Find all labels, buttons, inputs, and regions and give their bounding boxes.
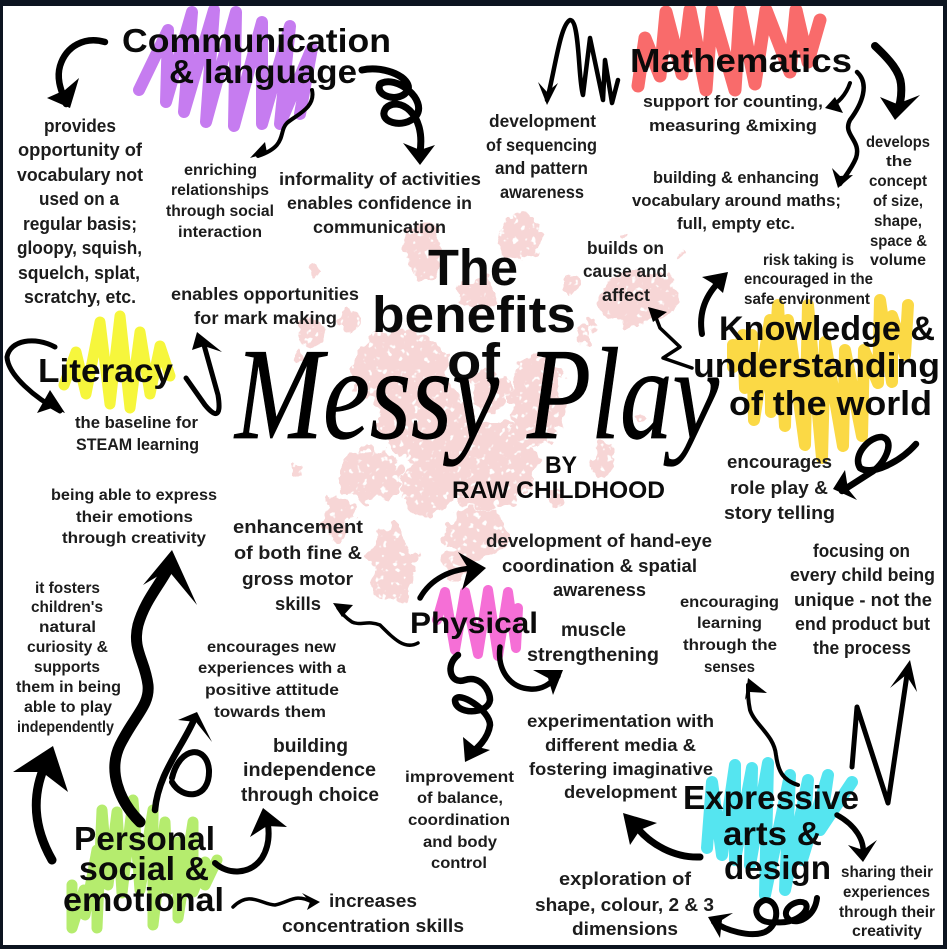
text: hand-eye coordination: development of hand-eye [486,531,712,551]
loop arrow to role play text [833,437,916,500]
heading: knowledge and understanding: Knowledge & [719,310,935,348]
text: concentration: increases [329,891,417,911]
text: vocabulary opportunity: provides [44,115,116,136]
arrow to vocabulary text [47,40,105,108]
text: learning through senses: encouraging [680,594,779,611]
text: curiosity and independent play: natural [39,619,96,636]
text: sharing experiences: experiences [843,884,930,901]
text: sequencing and pattern [486,111,597,202]
text: maths vocabulary: building & enhancing [653,168,819,187]
text: hand-eye coordination: awareness [553,580,646,600]
text: risk taking: risk taking is [763,252,854,269]
arrow to curiosity text [13,746,68,860]
byline: RAW CHILDHOOD [452,477,665,504]
text: cause and affect [583,238,667,305]
text: informality of activities: informality of activities [279,169,481,189]
text: role play: story telling [724,503,835,523]
text: balance and coordination: and body [423,834,497,851]
text: risk taking: encouraged in the [744,271,873,288]
text: unique child process [790,541,935,658]
text: steam learning: STEAM learning [76,436,199,454]
heading: knowledge and understanding: understanding [693,347,940,385]
text: size shape space volume: concept [869,173,928,190]
heading: personal social emotional: social & [79,850,209,887]
text: sharing experiences: creativity [852,923,922,940]
title: messy play: Messy [233,322,500,467]
text: size shape space volume: space & [870,233,927,250]
green scribble [72,800,217,928]
arrow to risk taking text [701,272,728,334]
loop arrow to confidence text [362,69,435,165]
title: messy play: Play [526,322,720,467]
heading: knowledge and understanding [693,310,940,423]
byline: BY [545,452,577,479]
text: unique child process: focusing on [813,541,910,561]
arrow to counting text [825,83,850,113]
text: steam learning [75,414,199,454]
title: the benefits of: of [447,333,501,390]
text: unique child process: every child being [790,565,935,585]
text: express emotions: being able to express [51,487,217,504]
text: fine and gross motor skills: enhancement [233,516,363,537]
text: vocabulary opportunity: opportunity of [18,139,143,160]
zigzag arrow to sequencing text [538,20,618,105]
heading: expressive arts and design [683,779,859,886]
panel: personal social and emotional [13,487,464,936]
text: independence through choice: building [273,736,348,757]
text: curiosity and independent play: supports [34,659,100,676]
text: experimentation and imagination: experimentation with [527,711,714,731]
text: size shape space volume: the [886,153,912,170]
text: counting and measuring [643,92,823,135]
text: learning through senses: through the [683,637,777,654]
text: size shape space volume [866,134,930,269]
wave arrow to concentration text [233,893,320,910]
text: balance and coordination: of balance, [417,790,503,807]
text: muscle strengthening [527,619,659,666]
text: mark making: enables opportunities [171,284,359,304]
heading: personal social emotional: emotional [63,881,224,918]
text: counting and measuring: support for counting, [643,92,823,111]
text: balance and coordination: control [431,855,487,872]
text: vocabulary opportunity: scratchy, etc. [24,286,136,307]
title: the benefits of: benefits [372,286,576,343]
arrow to senses text [745,678,798,785]
text: sequencing and pattern: of sequencing [486,135,597,155]
panel: knowledge and understanding of the world [583,238,940,523]
text: fine and gross motor skills [233,516,363,614]
text: concentration [282,891,464,936]
arrow to motor skills text [333,603,418,645]
loop arrow to balance text [451,655,490,762]
text: enriching relationships: enriching [184,162,257,179]
yellow scribble [733,300,908,458]
yellow scribble [64,316,170,408]
text: express emotions: through creativity [62,530,206,547]
text: vocabulary opportunity: regular basis; [23,213,137,234]
text: fine and gross motor skills: of both fine & [234,542,362,563]
text: balance and coordination [405,769,514,872]
text: muscle strengthening: strengthening [527,644,659,666]
text: learning through senses: learning [697,615,762,632]
text: sharing experiences: through their [839,904,935,921]
text: new experiences: positive attitude [205,682,339,699]
arrow to independence text [215,808,287,871]
heading: physical: Physical [410,607,538,640]
heading: communication and language: Communication [122,22,391,59]
text: muscle strengthening: muscle [561,619,626,641]
text: unique child process: the process [813,638,911,658]
red scribble [638,10,820,90]
wavy arrow to maths vocabulary text [832,72,864,188]
text: experimentation and imagination: different media & [545,735,696,755]
arrow to hand-eye text [420,552,486,598]
arrow to size and shape text [875,46,920,120]
text: enriching relationships: relationships [171,182,269,199]
heading: literacy: Literacy [38,352,174,389]
panel: literacy [7,284,359,454]
text: sequencing and pattern: awareness [500,182,584,202]
text: informality of activities: communication [313,217,446,237]
text: informality of activities [279,169,481,237]
text: vocabulary opportunity: gloopy, squish, [17,237,142,258]
arrow to muscle text [500,647,563,695]
heading: expressive arts and design: design [724,849,831,886]
heading: knowledge and understanding: of the world [729,385,932,423]
text: curiosity and independent play: independently [17,719,114,736]
title: messy play [233,322,720,467]
text: vocabulary opportunity: used on a [39,188,120,209]
text: counting and measuring: measuring &mixing [649,116,817,135]
text: vocabulary opportunity: vocabulary not [17,164,143,185]
text: vocabulary opportunity [17,115,143,307]
text: curiosity and independent play: it fosters [35,580,100,597]
n-shaped arrow to process text [852,660,917,803]
panel: mathematics [486,10,930,269]
arrow to sharing text [837,815,877,862]
squiggle arrow to cause and affect text [648,307,692,368]
text: maths vocabulary: vocabulary around maths; [632,191,841,210]
cyan scribble [707,763,852,895]
text: learning through senses: senses [704,659,755,676]
text: cause and affect: cause and [583,261,667,281]
text: new experiences [198,639,346,721]
text: shape colour dimensions: dimensions [572,919,678,939]
pink scribble [437,590,518,656]
panel: expressive arts and design [527,541,935,940]
text: maths vocabulary: full, empty etc. [677,214,795,233]
purple scribble [139,10,312,126]
text: experimentation and imagination: fostering imaginative [529,759,713,779]
arrow to media text [623,813,700,857]
heading: personal social emotional: Personal [74,820,215,857]
text: enriching relationships [166,162,274,241]
text: concentration: concentration skills [282,916,464,936]
text: shape colour dimensions: shape, colour, 2 & 3 [535,895,714,915]
text: curiosity and independent play: curiosity & [27,639,108,656]
heading: expressive arts and design: arts & [723,815,822,852]
text: sharing experiences [839,864,935,940]
text: role play: encourages [727,452,832,472]
text: experimentation and imagination: development [564,782,677,802]
text: size shape space volume: shape, [874,213,922,230]
text: informality of activities: enables confidence in [287,193,472,213]
text: shape colour dimensions: exploration of [559,869,692,889]
big arrow to emotions text [115,550,197,822]
paint splatter [294,214,689,603]
heading: communication and language: & language [169,53,357,90]
text: risk taking [744,252,873,308]
text: independence through choice [241,736,379,806]
text: new experiences: encourages new [207,639,337,656]
text: risk taking: safe environment [744,291,870,308]
heading: mathematics: Mathematics [630,42,852,79]
text: express emotions [51,487,217,547]
text: mark making [171,284,359,328]
text: size shape space volume: volume [870,252,926,269]
text: steam learning: the baseline for [75,414,199,432]
text: balance and coordination: coordination [408,812,510,829]
heading: expressive arts and design: Expressive [683,779,859,816]
text: independence through choice: through choice [241,785,379,806]
text: learning through senses [680,594,779,676]
title [233,239,720,504]
loop arrow to shape and colour text [708,898,817,938]
panel: physical [233,516,712,872]
text: cause and affect: builds on [587,238,664,258]
text: fine and gross motor skills: skills [275,593,321,614]
text: experimentation and imagination [527,711,714,802]
text: role play [724,452,835,523]
text: unique child process: end product but [795,614,930,634]
text: new experiences: experiences with a [198,660,346,677]
heading: communication and language [122,22,391,90]
text: mark making: for mark making [194,308,337,328]
text: curiosity and independent play: able to play [24,699,112,716]
text: balance and coordination: improvement [405,769,514,786]
text: curiosity and independent play [16,580,121,736]
text: express emotions: their emotions [76,509,193,526]
text: curiosity and independent play: children's [31,599,103,616]
text: cause and affect: affect [602,285,650,305]
text: role play: role play & [730,478,828,498]
byline [452,452,665,504]
arrow to steam text [7,341,65,413]
text: size shape space volume: develops [866,134,930,151]
text: new experiences: towards them [214,704,326,721]
panel: communication and language [17,10,481,307]
double arrow to mark making text [186,332,222,414]
heading: personal social emotional [63,820,224,918]
text: fine and gross motor skills: gross motor [242,568,353,589]
text: vocabulary opportunity: squelch, splat, [18,262,140,283]
text: size shape space volume: of size, [873,193,923,210]
text: enriching relationships: through social [166,203,274,220]
text: hand-eye coordination: coordination & spatial [502,556,697,576]
text: independence through choice: independence [243,760,376,781]
title: the benefits of: The [428,239,518,296]
text: sequencing and pattern: development [489,111,596,131]
text: sharing experiences: sharing their [841,864,933,881]
arrow to relationships text [250,90,313,158]
text: maths vocabulary [632,168,841,233]
text: unique child process: unique - not the [794,590,932,610]
looped arrow to new experiences text [155,712,212,810]
text: sequencing and pattern: and pattern [495,158,588,178]
text: hand-eye coordination [486,531,712,600]
text: shape colour dimensions [535,869,714,939]
text: enriching relationships: interaction [178,224,262,241]
text: curiosity and independent play: them in being [16,679,121,696]
title: the benefits of [372,239,576,390]
